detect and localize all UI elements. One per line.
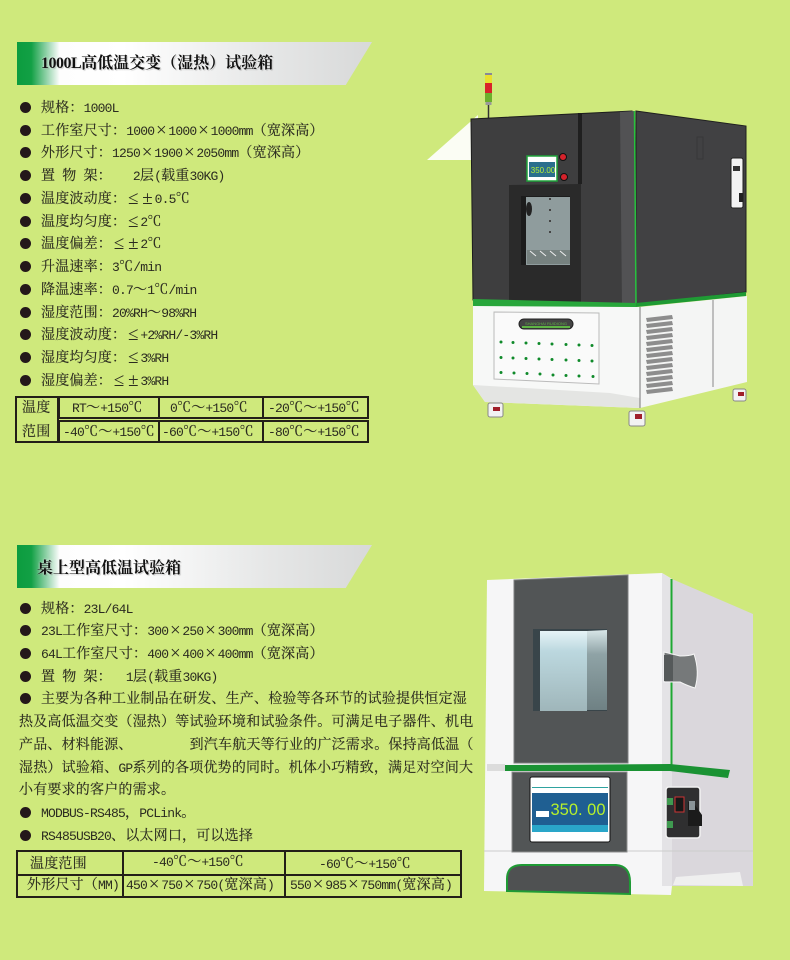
cabinet dark side <box>634 111 746 305</box>
cabinet dark front <box>471 111 636 306</box>
cell: size 64L: × <box>348 874 359 895</box>
spec: chamber size: × <box>156 120 167 141</box>
spec: temperature uniformity <box>41 210 162 232</box>
spec: outer size: × <box>184 142 195 163</box>
range RT: RT～+150℃ <box>72 401 142 416</box>
table: benchtop models <box>16 850 462 898</box>
spec: temperature uniformity: 温度均匀度： 2℃ <box>41 215 162 230</box>
side vents <box>646 315 673 394</box>
spec: shelf: 置 物 架： 2层(载重30KG) <box>41 169 224 184</box>
column divider 1 <box>122 852 124 896</box>
gray block left of shelf <box>487 764 505 771</box>
paragraph line 4: 湿热）试验箱、GP系列的各项优势的同时。机体小巧精致，满足对空间大 <box>19 761 473 776</box>
touch screen: 350. 00 <box>550 801 606 819</box>
spec: humidity uniformity: ≤ <box>128 347 139 368</box>
spec: protocols: MODBUS-RS485，PCLink。 <box>41 806 195 821</box>
cell frame bottom 1 <box>58 420 160 443</box>
spec: outer size: × <box>142 142 152 163</box>
spec: 23L chamber size <box>41 619 324 641</box>
touch screen: 350.00 <box>531 166 556 175</box>
cell frame top 1 <box>58 396 160 419</box>
spec: chamber size <box>41 119 324 141</box>
side controller <box>731 158 743 208</box>
spec: humidity fluctuation <box>41 323 217 345</box>
cell frame top 3 <box>262 396 369 419</box>
paragraph line 2: 热及高低温交变（湿热）等试验环境和试验条件。可满足电子器件、机电 <box>19 715 473 730</box>
cell: size 23L: × <box>184 874 195 895</box>
cell frame bottom 3 <box>262 420 369 443</box>
spec: shelf: 置 物 架： 1层(载重30KG) <box>41 670 218 685</box>
viewing window <box>533 629 607 711</box>
cell frame bottom 2 <box>158 420 264 443</box>
cell: range -40: -40℃～+150℃ <box>152 855 244 870</box>
range 0: 0℃～+150℃ <box>170 401 248 416</box>
heading: benchtop chamber title: 桌上型高低温试验箱 <box>37 560 181 577</box>
spec: 64L chamber size <box>41 642 324 664</box>
cabinet body <box>484 573 753 895</box>
cell: range -60: -60℃～+150℃ <box>319 857 411 872</box>
range -40: -40℃～+150℃ <box>63 425 155 440</box>
green trim <box>473 292 746 307</box>
paragraph line 5: 小有要求的客户的需求。 <box>19 783 175 798</box>
spec: humidity uniformity: 湿度均匀度： 3%RH <box>41 351 168 366</box>
control buttons <box>560 154 568 180</box>
table: temperature ranges <box>15 396 369 443</box>
green shelf divider <box>505 764 730 778</box>
spec: 23L chamber size: × <box>205 620 216 641</box>
spec: temperature deviation: ≤ <box>114 233 124 254</box>
column divider 2 <box>284 852 286 896</box>
spec: chamber size: 工作室尺寸：1000 1000 1000mm（宽深高） <box>41 124 324 139</box>
cell frame top 2 <box>158 396 264 419</box>
row divider <box>18 874 460 876</box>
spec: temperature deviation <box>41 232 162 254</box>
spec: humidity fluctuation: 湿度波动度： +2%RH/-3%RH <box>41 328 217 343</box>
cell: size 23L: 450 750 750(宽深高) <box>126 878 274 893</box>
spec: humidity deviation: 湿度偏差： 3%RH <box>41 374 168 389</box>
spec: humidity deviation: ± <box>128 370 138 391</box>
spec: cooling rate: 降温速率：0.7～1℃/min <box>41 283 196 298</box>
range -20: -20℃～+150℃ <box>268 401 360 416</box>
panel: 1000L specs <box>15 42 372 443</box>
panel: benchtop specs <box>16 545 473 898</box>
cell: size 64L: × <box>313 874 323 895</box>
spec: chamber size: × <box>198 120 209 141</box>
heading: 1000L chamber title: 1000L高低温交变（湿热）试验箱 <box>41 55 273 72</box>
heading banner: benchtop chamber <box>17 545 372 588</box>
spec: humidity fluctuation: ≤ <box>128 324 139 345</box>
spec: 23L chamber size: 23L工作室尺寸：300 250 300mm（宽深高） <box>41 624 324 639</box>
spec: interfaces: RS485USB20、以太网口，可以选择 <box>41 829 253 844</box>
spec: temperature fluctuation: ± <box>142 188 153 209</box>
spec: 64L chamber size: × <box>170 643 181 664</box>
spec: 64L chamber size: × <box>205 643 216 664</box>
spec: outer size <box>41 141 309 163</box>
spec: humidity deviation: ≤ <box>114 370 124 391</box>
paragraph line 3: 产品、材料能源、 到汽车航天等行业的广泛需求。保持高低温（ <box>19 738 474 753</box>
label cell <box>15 396 59 443</box>
casters <box>488 389 746 426</box>
spec: temperature fluctuation <box>41 187 190 209</box>
spec: temperature fluctuation: 温度波动度： 0.5℃ <box>41 192 190 207</box>
base front panel: SHANGHAI RUIDIONG <box>525 321 567 326</box>
lower dark panel <box>512 772 627 852</box>
cell: outer size label: 外形尺寸（MM) <box>27 878 119 893</box>
light tower <box>485 73 492 119</box>
spec: temperature deviation: 温度偏差： 2℃ <box>41 237 162 252</box>
door window <box>521 196 570 265</box>
spec: humidity uniformity <box>41 346 168 368</box>
spec: size: 规格：23L/64L <box>41 602 133 617</box>
spec: outer size: 外形尺寸：1250 1900 2050mm（宽深高） <box>41 146 309 161</box>
cell: temperature range label: 温度范围 <box>30 857 87 872</box>
range -60: -60℃～+150℃ <box>162 425 254 440</box>
base front panel <box>494 312 599 384</box>
side control box <box>666 787 702 838</box>
touch screen <box>530 777 610 842</box>
cell: size 64L: 550 985 750mm(宽深高) <box>290 878 452 893</box>
spec: heating rate: 升温速率：3℃/min <box>41 260 161 275</box>
spec: humidity range: 湿度范围：20%RH～98%RH <box>41 306 196 321</box>
spec: temperature uniformity: ≤ <box>128 211 139 232</box>
bottom green arch vent <box>507 865 630 894</box>
upper dark door panel <box>514 575 628 763</box>
cabinet base <box>473 296 747 408</box>
spec: 23L chamber size: × <box>170 620 181 641</box>
spec: temperature fluctuation: ≤ <box>128 188 139 209</box>
spec: size: 规格：1000L <box>41 101 119 116</box>
label: temperature: 温度 <box>22 401 50 416</box>
touch screen <box>527 156 557 181</box>
illustration: 1000L chamber <box>427 73 747 426</box>
spec: humidity deviation <box>41 369 168 391</box>
spec: 64L chamber size: 64L工作室尺寸：400 400 400mm（宽深高） <box>41 647 324 662</box>
white triangle behind cabinet <box>427 115 478 160</box>
label: range: 范围 <box>22 425 50 440</box>
spec: temperature deviation: ± <box>128 233 138 254</box>
heading banner: 1000L chamber <box>17 42 372 85</box>
range -80: -80℃～+150℃ <box>268 425 360 440</box>
door handle <box>664 652 697 688</box>
paragraph: description: 主要为各种工业制品在研发、生产、检验等各环节的试验提供恒定湿 <box>41 692 467 707</box>
cell: size 23L: × <box>149 874 159 895</box>
